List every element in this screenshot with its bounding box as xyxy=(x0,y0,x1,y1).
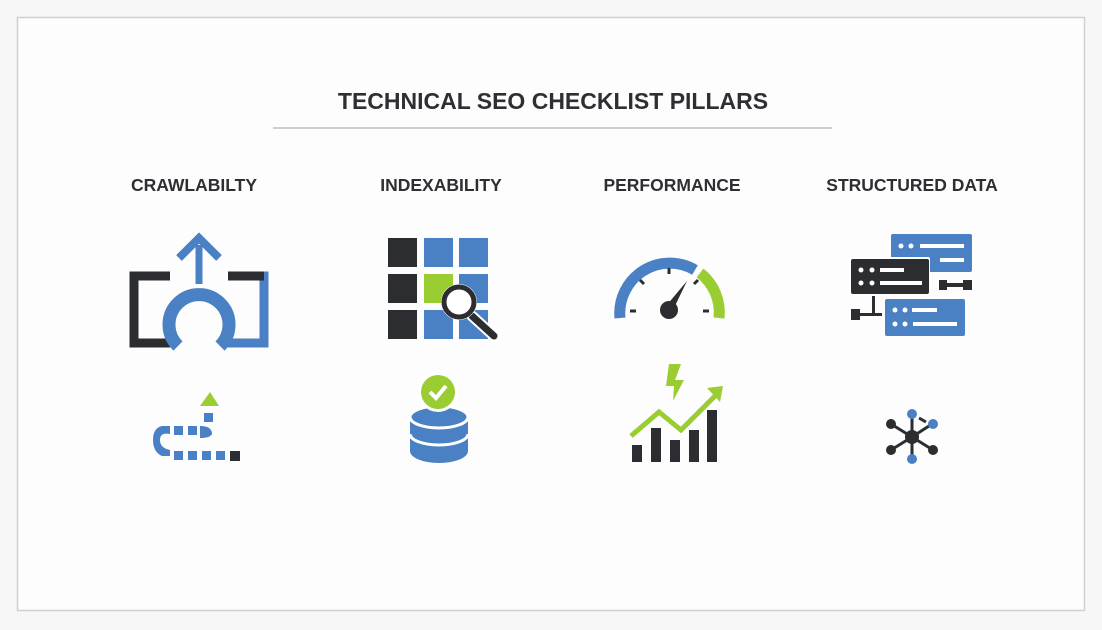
heading: performance: PERFORMANCE xyxy=(603,175,741,195)
heading: structured data: STRUCTURED DATA xyxy=(826,175,998,195)
icon: database check xyxy=(410,372,468,463)
icon: index grid with magnifier xyxy=(388,238,494,339)
title: TECHNICAL SEO CHECKLIST PILLARS xyxy=(338,88,768,114)
icon: crawl bracket with arrow xyxy=(134,238,264,346)
icon: speed gauge xyxy=(620,263,719,319)
heading: indexability: INDEXABILITY xyxy=(380,175,502,195)
icon: growth chart with lightning xyxy=(631,364,723,462)
icon: network nodes xyxy=(886,409,938,464)
icon: crawl path xyxy=(153,392,240,461)
heading: crawlability: CRAWLABILTY xyxy=(131,175,257,195)
icon: server stack xyxy=(849,234,972,336)
